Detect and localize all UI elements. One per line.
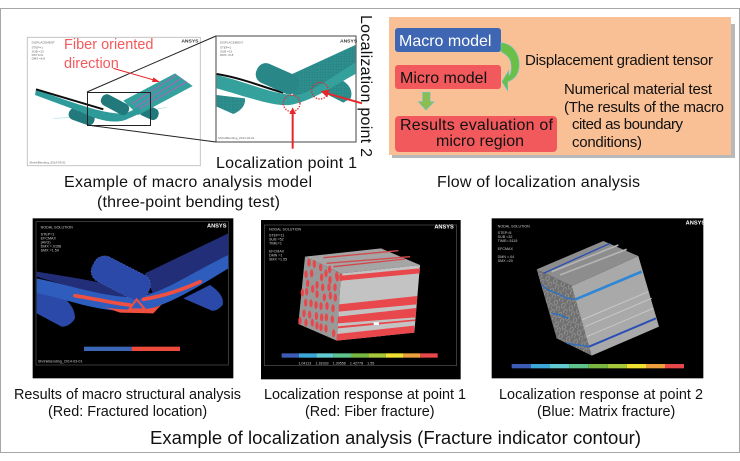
caption: macro analysis model: (three-point bending test) bbox=[97, 194, 280, 211]
callout: zoom rectangle and guide lines bbox=[87, 36, 216, 142]
caption: localization response at point 2: Localization response at point 2 bbox=[499, 387, 703, 403]
panel: localization response at point 2: SUB =32 bbox=[498, 235, 512, 239]
caption: results of macro structural analysis: (Red: Fractured location) bbox=[48, 404, 207, 420]
panel: magnified model image: STEP=1 bbox=[220, 46, 232, 50]
panel: macro structural analysis result: EFCMAX bbox=[41, 236, 56, 240]
box: results evaluation: Results evaluation of bbox=[400, 117, 554, 134]
box: results evaluation: micro region bbox=[436, 133, 524, 150]
panel: macro analysis model image: ShrinkBending_2014-03-01 bbox=[29, 161, 66, 165]
label: displacement gradient tensor: Displacement gradient tensor bbox=[525, 52, 713, 69]
panel: localization response at point 2: STEP=5 bbox=[498, 231, 511, 235]
panel: localization response at point 1: NODAL SOLUTION bbox=[269, 228, 302, 232]
panel: macro analysis model image: DISPLACEMENT bbox=[32, 40, 55, 44]
panel: magnified model image: ShrinkBending_2014-03-01 bbox=[218, 136, 255, 140]
label: localization point 1: Localization point 1 bbox=[216, 155, 357, 172]
box: micro model bbox=[395, 65, 501, 89]
arrow: to localization point 1 bbox=[289, 107, 296, 149]
panel: macro structural analysis result bbox=[33, 218, 233, 378]
title: example of localization analysis: Example of localization analysis (Fracture indicator contour) bbox=[150, 427, 641, 448]
box: macro model bbox=[395, 28, 501, 52]
panel: localization response at point 2: DMN =.04 bbox=[498, 255, 514, 259]
caption: results of macro structural analysis: Results of macro structural analysis bbox=[14, 387, 241, 403]
panel: macro structural analysis result: NODAL SOLUTION bbox=[41, 226, 73, 230]
panel: localization response at point 1: SUB =52 bbox=[269, 238, 284, 242]
panel: magnified model image bbox=[113, 36, 362, 149]
caption: localization response at point 1: (Red: Fiber fracture) bbox=[305, 404, 435, 420]
arrow: micro to results bbox=[418, 92, 434, 110]
panel: macro structural analysis result: ANSYS bbox=[207, 223, 227, 229]
panel: localization response at point 1: STEP=11 bbox=[269, 234, 284, 238]
panel: macro structural analysis result: STEP=1 bbox=[41, 232, 54, 236]
text: numerical material test: Numerical material test bbox=[564, 81, 713, 98]
panel: macro analysis model image: SUB =13 bbox=[32, 49, 44, 53]
panel: magnified model image: DMX =6.8 bbox=[220, 53, 234, 57]
panel: macro analysis model image: DMX =6.8 bbox=[32, 57, 45, 61]
arrow: curved macro to micro bbox=[501, 43, 519, 91]
panel: localization response at point 2 bbox=[492, 218, 705, 378]
panel: macro structural analysis result: ShrinkBending_2014-03-01 bbox=[38, 360, 83, 364]
caption: localization response at point 2: (Blue: Matrix fracture) bbox=[537, 404, 675, 420]
caption: localization response at point 2 bbox=[499, 387, 703, 420]
label: fiber oriented direction: direction bbox=[64, 56, 119, 72]
text: numerical material test: conditions) bbox=[572, 134, 642, 151]
fiber dots bbox=[298, 259, 343, 337]
panel: macro analysis model image: RSYS=0 bbox=[32, 53, 44, 57]
panel: flow of localization analysis bbox=[389, 17, 735, 158]
panel: localization response at point 1: 1.04113 1.18333 1.30556 1.42778 1.55 bbox=[298, 361, 374, 365]
caption: results of macro structural analysis bbox=[14, 387, 241, 420]
label: fiber oriented direction bbox=[64, 37, 153, 72]
panel: localization response at point 1: SMX =1.55 bbox=[269, 258, 287, 262]
panel: macro analysis model image bbox=[27, 37, 200, 166]
panel: localization response at point 1 bbox=[261, 220, 461, 379]
caption: macro analysis model: Example of macro analysis model bbox=[64, 174, 312, 191]
caption: localization response at point 1: Localization response at point 1 bbox=[264, 387, 466, 403]
text: numerical material test bbox=[564, 81, 724, 151]
panel: macro analysis model image: STEP=1 bbox=[32, 46, 43, 50]
panel: macro analysis model image: ANSYS bbox=[181, 38, 199, 44]
arrow: fiber direction bbox=[113, 68, 160, 82]
text: numerical material test: (The results of the macro bbox=[564, 99, 724, 116]
label: fiber oriented direction: Fiber oriented bbox=[64, 37, 153, 53]
label: localization point 2: Localization point 2 bbox=[357, 15, 374, 157]
panel: localization response at point 2: ANSYS bbox=[686, 221, 705, 227]
caption: macro analysis model bbox=[64, 174, 312, 211]
panel: magnified model image: DISPLACEMENT bbox=[220, 40, 243, 44]
panel: macro structural analysis result: (AVG) bbox=[41, 240, 51, 244]
arrow: to localization point 2 bbox=[321, 89, 362, 103]
callout: localization point circles bbox=[283, 82, 328, 112]
box: micro model: Micro model bbox=[400, 70, 487, 87]
panel: magnified model image: ANSYS bbox=[340, 38, 358, 44]
caption: localization response at point 1 bbox=[264, 387, 466, 420]
panel: localization response at point 1: TIME=1 bbox=[269, 242, 282, 246]
box: macro model: Macro model bbox=[399, 33, 491, 50]
caption: flow of localization analysis: Flow of localization analysis bbox=[437, 174, 640, 191]
panel: localization response at point 2: NODAL SOLUTION bbox=[498, 224, 530, 228]
panel: localization response at point 2: EFCMAX bbox=[498, 247, 513, 251]
panel: localization response at point 1: DMN =1 bbox=[269, 254, 283, 258]
panel: localization response at point 1: ANSYS bbox=[434, 225, 454, 231]
box: results evaluation bbox=[395, 116, 557, 152]
panel: macro structural analysis result: DMX =.0158 bbox=[41, 244, 61, 248]
panel: localization response at point 1: EFCMAX bbox=[269, 250, 285, 254]
panel: localization response at point 2: SMX =20 bbox=[498, 259, 513, 263]
panel: localization response at point 2: TIME=.5115 bbox=[498, 239, 517, 243]
panel: macro structural analysis result: SMX =1.59 bbox=[41, 248, 59, 252]
panel: magnified model image: SUB =13 bbox=[220, 49, 232, 53]
text: numerical material test: cited as boundary bbox=[572, 116, 684, 133]
